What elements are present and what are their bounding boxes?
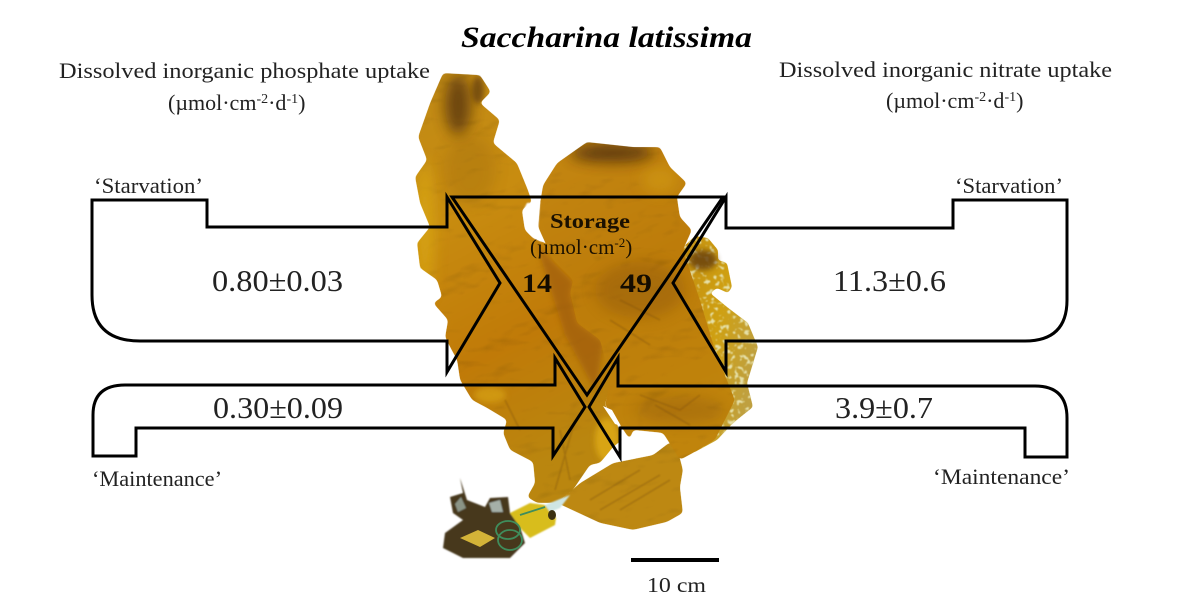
arrow: nitrate maintenance [589,358,1067,457]
storage label: ) [625,235,632,259]
storage label: Storage [550,209,630,233]
heading: nitrate uptake: -2 [974,90,986,105]
arrow: phosphate starvation [92,197,500,372]
stipe and cylinder [510,503,556,538]
holdfast [443,478,570,558]
heading: nitrate uptake: ) [1016,88,1023,113]
heading: phosphate uptake: (µmol·cm [168,90,256,115]
right frond [538,142,735,460]
storage value: nitrate: 49 [620,269,652,298]
label: starvation left: ‘Starvation’ [94,173,203,198]
heading: phosphate uptake: -2 [256,92,268,107]
heading: nitrate uptake: Dissolved inorganic nitrate uptake [779,57,1112,82]
seaweed photo: Saccharina latissima [415,73,758,558]
label: starvation right: ‘Starvation’ [955,173,1063,198]
storage label: -2 [614,235,625,250]
value: phosphate starvation: 0.80±0.03 [212,263,343,298]
heading: nitrate uptake [779,57,1112,113]
frond shading [416,75,619,462]
label: maintenance left: ‘Maintenance’ [92,466,222,491]
heading: nitrate uptake: ·d [986,88,1004,113]
storage triangle [452,197,723,395]
arrow: nitrate starvation [673,197,1067,372]
tag [460,530,495,547]
heading: nitrate uptake: (µmol·cm [886,88,974,113]
title: Saccharina latissima [461,21,752,54]
scale bar [631,558,719,597]
value: phosphate maintenance: 0.30±0.09 [213,390,343,425]
right frond speckled edge [670,236,758,453]
white gaps [523,202,542,242]
heading: phosphate uptake: -1 [286,92,298,107]
dark patch on speckled edge [689,250,717,270]
rope [496,507,545,550]
label: maintenance right: ‘Maintenance’ [933,464,1070,489]
wrinkles [505,300,700,510]
value: nitrate maintenance: 3.9±0.7 [835,390,933,425]
heading: phosphate uptake: ) [298,90,305,115]
storage label [530,209,632,259]
storage label: (µmol·cm [530,235,614,259]
arrow: phosphate maintenance [93,358,585,456]
heading: phosphate uptake: Dissolved inorganic phosphate uptake [59,58,430,83]
heading: nitrate uptake: -1 [1004,90,1016,105]
left frond [415,73,622,503]
left frond shadow strip beside right frond [535,240,603,392]
value: nitrate starvation: 11.3±0.6 [833,263,946,298]
storage value: phosphate: 14 [522,269,552,298]
scale bar: 10 cm [647,573,706,597]
heading: phosphate uptake: ·d [268,90,286,115]
heading: phosphate uptake [59,58,430,115]
lower frond [557,442,683,530]
